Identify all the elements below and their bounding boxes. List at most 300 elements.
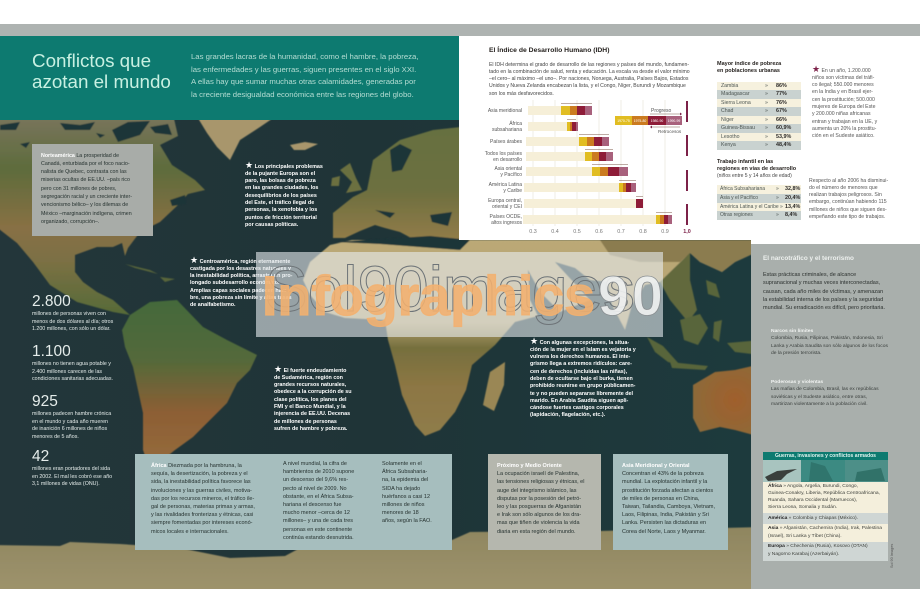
watermark orange text: Infographics90: [262, 265, 663, 327]
column 1: gal de personas, materias primas y armas,: [151, 504, 255, 510]
panel text: diaria en esta región del mundo.: [497, 529, 576, 535]
table: pobreza urbana: »: [765, 100, 768, 106]
table: pobreza urbana: Kenya: [721, 142, 736, 148]
panel text: Canadá, enturbiada por el foco nacio-: [41, 161, 130, 167]
panel text: Concentran el 43% de la pobreza: [622, 471, 704, 477]
panel text: Corea del Norte, Laos y Myanmar.: [622, 529, 706, 535]
column 2: obstante, en el África Subsa-: [283, 494, 354, 500]
row: Asia oriental y Pacifico: [526, 167, 628, 176]
column 1: micos locales e internacionales.: [151, 529, 229, 535]
column 3: [382, 461, 432, 524]
note: trabajo peligroso: realizan trabajos peligrosos. Sin: [809, 192, 882, 198]
legend: Progreso: [651, 108, 672, 114]
column 1: sida, la inestabilidad política favorece las: [151, 479, 251, 485]
note: trafico de ninos: niños son víctimas del tráfi-: [812, 75, 874, 81]
IDH paragraph: Unidos y Nueva Zelanda encabezan la lista, y el Congo, Níger, Burundi y Mozambique: [489, 83, 686, 89]
table: trabajo infantil: »: [776, 212, 779, 218]
note: mujer en el islam: cándose fuertes castigos corporales: [530, 405, 624, 411]
note: Europa: de la pujante Europa son el: [245, 171, 315, 177]
column 2: continúa estando desnutrida.: [283, 535, 354, 541]
note: Centroamerica: castigada por los desastres naturales y: [190, 266, 291, 272]
table: trabajo infantil: 20,4%: [785, 195, 800, 201]
row: Africa subsahariana: [528, 122, 578, 131]
panel text: Asia Meridional y Oriental: [622, 463, 690, 469]
column 1: sequía, la desertización, la pobreza y el: [151, 471, 248, 477]
panel: Indice de Desarrollo Humano: [459, 36, 920, 240]
intro text: Las grandes lacras de la humanidad, como el hambre, la pobreza,: [191, 52, 418, 61]
note: trabajo peligroso: do el número de menores que: [809, 185, 878, 191]
statistic: 2.800: menos de dos dólares al día; otros: [32, 319, 113, 325]
row labels: América Latina: [489, 182, 522, 188]
column 2: hambrientos de 2010 supone: [283, 469, 354, 475]
column 2: millones– y una de cada tres: [283, 518, 353, 524]
table: trabajo infantil: »: [776, 195, 779, 201]
subsection: poderosas: martirizan violentamente a la población civil.: [771, 402, 868, 407]
intro text: la creciente desigualdad económica entre las regiones del globo.: [191, 90, 414, 98]
note: trafico de ninos: en la India y en Brasil ejer-: [812, 89, 873, 95]
note: mujer en el islam: te y no pueden separarse libremente del: [530, 391, 633, 397]
statistic: 2.800: millones de personas viven con: [32, 311, 106, 317]
table: pobreza urbana: 53,9%: [776, 134, 791, 140]
south america: [122, 300, 257, 470]
subsection: poderosas: Las mafias de Colombia, Brasil, las ex repúblicas: [771, 387, 879, 392]
note: Sudamerica: obedece a la corrupción de su: [274, 389, 352, 395]
header panel: [0, 36, 459, 120]
note: Europa: ★ Los principales problemas: [245, 160, 323, 170]
table: pobreza urbana: Lesotho: [721, 134, 739, 140]
table: pobreza urbana: 48,4%: [776, 142, 791, 148]
subsection: narcos: [771, 328, 888, 356]
panel: Norteamerica: [32, 144, 153, 236]
panel text: leo y las posguerras de Afganistán: [497, 504, 581, 510]
indochina: [660, 253, 697, 322]
subsection: poderosas: [771, 380, 879, 407]
panel text: miserias ocultas de EE.UU. –país rico: [41, 177, 130, 183]
column 2: pecto al nivel de 2009. No: [283, 486, 347, 492]
row: Africa: Ruanda, Sahara Occidental (Marruecos),: [768, 498, 857, 503]
note: Europa: desequilibrios de los países: [245, 193, 317, 199]
statistic: 2.800: 2.800: [32, 293, 71, 310]
row labels: altos ingresos: [491, 220, 522, 226]
note: trafico de ninos: co ilegal; 550.000 menores: [812, 82, 874, 88]
row labels: Asia meridional: [488, 108, 522, 114]
row labels: y Caribe: [503, 188, 522, 194]
heading: pobreza urbana: en poblaciones urbanas: [717, 68, 780, 74]
intro text: las enfermedades y las guerras, siguen presentes en el siglo XXI.: [191, 64, 416, 74]
australia: [693, 364, 761, 437]
maximum value marker: [686, 101, 688, 225]
statistic: 925: [32, 393, 112, 440]
panel: Africa: [135, 454, 452, 550]
note: trafico de ninos: mujeres de Europa del Este: [812, 104, 875, 110]
panel text: Próximo y Medio Oriente: [497, 463, 562, 469]
table: pobreza urbana: 77%: [776, 91, 787, 97]
heading: trabajo infantil: (niños entre 5 y 14 años de edad): [717, 172, 792, 178]
row labels: África: [509, 120, 522, 127]
table: trabajo infantil: África Subsahariana: [720, 186, 765, 192]
note: trafico de ninos: ción en el Sudeste asiático.: [812, 133, 875, 139]
title: azotan el mundo: [32, 70, 171, 92]
note: trabajo peligroso: empeñando este tipo de trabajos.: [809, 214, 885, 220]
note: Europa: en las grandes ciudades, los: [245, 185, 318, 191]
row: Africa: [768, 482, 880, 510]
islands: [125, 264, 761, 370]
column 2: personas en este continente: [283, 527, 352, 533]
statistic: 1.100: [32, 343, 113, 382]
panel text: [497, 463, 584, 535]
note: mujer en el islam: vulnera los derechos humanos. El inte-: [530, 354, 630, 360]
x axis: 0.5: [573, 229, 581, 235]
column 2: hariana el descenso fue: [283, 502, 341, 508]
panel: Asia Meridional y Oriental: [613, 454, 728, 550]
subsection: narcos: Lanka y Arabia Saudita son sólo algunos de los focos: [771, 344, 888, 349]
table: pobreza urbana: Sierra Leona: [721, 100, 751, 106]
note: Europa: por causas políticas.: [245, 222, 298, 228]
note: mujer en el islam: ★ Con algunas excepciones, la situa-: [530, 336, 629, 346]
panel text: las tensiones religiosas y étnicas, el: [497, 479, 584, 485]
IDH paragraph: son los más desfavorecidos.: [489, 91, 554, 97]
table: trabajo infantil: Otras regiones: [720, 212, 753, 218]
x axis: [529, 229, 691, 235]
panel text: de miles de personas en China,: [622, 496, 699, 502]
row: Africa: África » Angola, Argelia, Burundi, Congo,: [768, 484, 858, 489]
note: Sudamerica: ★ El fuerte endeudamiento: [274, 364, 346, 374]
subsection: narcos: Narcos sin límites: [771, 329, 813, 334]
table: trabajo infantil: Asia y el Pacífico: [720, 195, 758, 201]
panel intro: mundial. Su erradicación es difícil, pero prioritaria.: [763, 305, 885, 311]
panel text: auge del integrismo islámico, las: [497, 488, 576, 494]
note: Sudamerica: de millones de personas: [274, 419, 337, 425]
x axis: 0.8: [639, 229, 647, 235]
table: trabajo infantil: 13,4%: [785, 204, 800, 210]
table: pobreza urbana: »: [765, 116, 768, 122]
x axis: 0.6: [595, 229, 603, 235]
table: pobreza urbana: »: [765, 125, 768, 131]
column 2: A nivel mundial, la cifra de: [283, 461, 347, 467]
africa and asia: [303, 240, 761, 436]
row labels: [485, 108, 522, 226]
note: mujer en el islam: [530, 336, 636, 418]
statistic: 42: [32, 448, 112, 487]
table: trabajo infantil: 32,8%: [785, 186, 800, 192]
x axis: 0.9: [661, 229, 669, 235]
note: mujer en el islam: cen de derechos (incluidas las niñas),: [530, 369, 627, 375]
statistic: 925: en el mundo y cada año mueren: [32, 419, 108, 425]
panel heading: El narcotráfico y el terrorismo: [763, 254, 854, 262]
panel text: vencionismo bélico– y los dilemas de: [41, 202, 128, 208]
subsection: narcos: Colombia, Rusia, Filipinas, Pakistán, Indonesia, Sri: [771, 336, 883, 341]
panel intro: la estabilidad interna de los países y la seguridad: [763, 297, 883, 303]
table: trabajo infantil: »: [780, 204, 783, 210]
table: pobreza urbana: Guinea-Bissau: [721, 125, 755, 131]
panel text: Norteamérica La prosperidad de: [41, 152, 119, 158]
panel intro: supranacional y muchas veces interconectadas,: [763, 280, 880, 286]
title: [32, 50, 171, 92]
table: guerras: [763, 452, 888, 560]
column 3: Solamente en el: [382, 461, 422, 467]
legend: 1980-90: [651, 119, 663, 123]
north america: [0, 110, 205, 315]
IDH heading: El Índice de Desarrollo Humano (IDH): [489, 47, 609, 54]
note: trabajo peligroso: Respecto al año 2006 ha disminui-: [809, 178, 888, 184]
column 3: na, la epidemia del: [382, 477, 428, 483]
row labels: oriental y CEI: [492, 204, 522, 210]
heading: trabajo infantil: [717, 158, 796, 178]
row: America Latina y Caribe: [524, 183, 636, 192]
watermark: [256, 252, 663, 337]
column 1: África Diezmada por la hambruna, la: [151, 463, 242, 469]
note: Sudamerica: de Sudamérica, región con: [274, 375, 343, 381]
legend: 1990-99: [668, 119, 680, 123]
table: pobreza urbana: 66%: [776, 116, 787, 122]
note: trafico de ninos: entran y trabajan en la UE, y: [812, 119, 877, 125]
note: Europa: puntos de fricción territorial: [245, 215, 317, 221]
table: trabajo infantil: América Latina y el Caribe: [720, 204, 779, 210]
world map: [0, 120, 751, 589]
statistic: 42: 42: [32, 448, 49, 465]
row: Asia meridional: [528, 106, 592, 115]
note: Europa: [245, 160, 323, 228]
panel text: disputas por la posesión del petró-: [497, 496, 581, 502]
statistic: 1.100: millones no tienen agua potable y: [32, 361, 111, 367]
IDH paragraph: El IDH determina el grado de desarrollo de las regiones y países del mundo, fundamen-: [489, 62, 689, 68]
statistic: 925: de inanición 6 millones de niños: [32, 426, 107, 432]
top grey band: [0, 24, 920, 36]
table header: Guerras, invasiones y conflictos armados: [775, 453, 876, 459]
panel intro: Estas prácticas criminales, de alcance: [763, 272, 856, 278]
note: trafico de ninos: ★ En un año, 1.200.000: [812, 64, 871, 74]
x axis: 1,0: [683, 229, 691, 235]
statistic: 1.100: condiciones sanitarias adecuadas.: [32, 376, 113, 382]
table: pobreza urbana: »: [765, 134, 768, 140]
panel text: mas que tiñen de violencia la vida: [497, 520, 580, 526]
column 1: involuciones y las guerras civiles, motiva-: [151, 488, 252, 494]
legend: [615, 108, 682, 134]
note: mujer en el islam: ción de la mujer en el Islam es vejatoria y: [530, 347, 636, 353]
subsection: poderosas: soviéticas y el Sudeste asiático, entre otras,: [771, 395, 867, 400]
note: Sudamerica: clase política, los planes del: [274, 397, 347, 403]
table: pobreza urbana: »: [765, 108, 768, 114]
note: trabajo peligroso: millones de niños que siguen des-: [809, 207, 887, 213]
row: America: América » Colombia y Chiapas (México).: [768, 516, 858, 521]
column 2: mucho menor –cerca de 12: [283, 510, 350, 516]
table: pobreza urbana: Madagascar: [721, 91, 750, 97]
panel: narcotrafico y terrorismo: Sol 90 Images: [890, 544, 894, 568]
subsection: poderosas: Poderosas y violentas: [771, 380, 823, 385]
table: pobreza urbana: 86%: [776, 82, 787, 88]
table header: [763, 452, 888, 460]
panel text: e Irak son sólo algunos de los dra-: [497, 512, 581, 518]
note: Centroamerica: bre, una pobreza sin límite y altas tasas: [190, 295, 292, 301]
title: Conflictos que: [32, 50, 151, 71]
row labels: Asia oriental: [494, 166, 522, 172]
progress brackets: [561, 104, 672, 212]
row: Africa: Sierra Leona, Somalia y Sudán.: [768, 505, 837, 510]
x axis: 0.3: [529, 229, 537, 235]
row: Europa central: [524, 199, 643, 208]
panel text: segregación racial y un creciente inter-: [41, 194, 132, 200]
note: trabajo peligroso: [809, 178, 888, 220]
legend: 1975-80: [634, 119, 646, 123]
IDH paragraph: –el cero– al máximo –el uno–. Por naciones, Noruega, Australia, Países Bajos, Estados: [489, 76, 688, 82]
row: Asia: (Israel), Sri Lanka y Tíbet (China).: [768, 534, 842, 538]
row: Todos los paises en desarrollo: [526, 152, 613, 161]
statistic: 42: en 2002. El mal les cobró ese año: [32, 474, 112, 480]
greenland and iceland: [193, 110, 318, 160]
panel text: Taiwan, Tailandia, Camboya, Vietnam,: [622, 504, 715, 510]
note: Centroamerica: longado subdesarrollo económico.: [190, 280, 280, 286]
row labels: Todos los países: [485, 151, 522, 157]
panel text: México –marginación indígena, crimen: [41, 211, 132, 217]
intro text: A ellas hay que sumar muchas otras calamidades, generadas por: [191, 77, 416, 86]
note: Sudamerica: injerencia de EE.UU. Decenas: [274, 411, 350, 417]
table: pobreza urbana: 76%: [776, 100, 787, 106]
note: trafico de ninos: y 200.000 niñas africanas: [812, 111, 871, 117]
lakes and inland seas: [0, 121, 470, 250]
note: Centroamerica: de analfabetismo.: [190, 302, 236, 308]
heading: pobreza urbana: Mayor índice de pobreza: [717, 60, 781, 66]
statistic: 42: millones eran portadores del sida: [32, 466, 110, 472]
table: pobreza urbana: Chad: [721, 108, 733, 114]
IDH paragraph: tado en la combinación de salud, renta y educación. La escala va desde el valor mínimo: [489, 69, 690, 75]
table: trabajo infantil: »: [776, 186, 779, 192]
table: pobreza urbana: 60,9%: [776, 125, 791, 131]
subsection: narcos: de la presión terrorista.: [771, 351, 822, 356]
row: America: [763, 513, 888, 524]
table: pobreza urbana: Zambia: [721, 82, 738, 88]
IDH paragraph: [489, 62, 690, 97]
note: Sudamerica: FMI y el Banco Mundial, y la: [274, 404, 346, 410]
legend: Retrocesos: [658, 129, 682, 134]
row labels: en desarrollo: [493, 157, 522, 163]
note: Centroamerica: Amplias capas sociales padecen ham-: [190, 288, 288, 294]
row: Asia: [768, 526, 882, 538]
note: Centroamerica: ★ Centroamérica, región eternamente: [190, 256, 290, 266]
panel text: prostitución forzada afectan a cientos: [622, 488, 713, 494]
continents: [0, 110, 761, 589]
row: Africa: Guinea-Conakry, Liberia, República Centroafricana,: [768, 491, 880, 496]
panel: narcotrafico y terrorismo: [751, 244, 920, 589]
note: mujer en el islam: marido. En Arabia Saudita siguen apli-: [530, 398, 628, 404]
table: pobreza urbana: »: [765, 82, 768, 88]
note: Europa: personas, la xenofobia y los: [245, 207, 317, 213]
column 3: millones de niños: [382, 502, 424, 508]
note: mujer en el islam: deben de ocultarse bajo el burka, tienen: [530, 376, 633, 382]
panel text: mundial. La explotación infantil y la: [622, 479, 707, 485]
panel text: pero con 31 millones de pobres,: [41, 186, 116, 192]
statistic: 925: menores de 5 años.: [32, 434, 79, 440]
column 3: menores de 18: [382, 510, 419, 516]
x axis: 0.7: [617, 229, 625, 235]
statistic: 42: 3,1 millones de vidas (ONU).: [32, 481, 100, 487]
row labels: subsahariana: [492, 127, 522, 133]
chart: IDH bars: [484, 100, 691, 235]
table: pobreza urbana: »: [765, 91, 768, 97]
row labels: y Pacífico: [500, 172, 522, 178]
row: Paises arabes: [526, 137, 609, 146]
column 2: [283, 461, 354, 541]
panel: Proximo y Medio Oriente: [488, 454, 601, 550]
panel text: Laos, Filipinas, India, Pakistán y Sri: [622, 512, 709, 518]
row labels: Países OCDE,: [489, 214, 522, 220]
antarctica: [0, 527, 761, 589]
northern asia band: [600, 240, 761, 272]
x axis: 0.4: [551, 229, 559, 235]
table: pobreza urbana: 67%: [776, 108, 787, 114]
column 2: un descenso del 9,6% res-: [283, 477, 348, 483]
note: Centroamerica: [190, 256, 292, 308]
table: pobreza urbana: Níger: [721, 116, 734, 122]
note: trafico de ninos: aumenta un 20% la prostitu-: [812, 126, 876, 132]
column 3: África Subsaharia-: [382, 469, 427, 475]
legend: 1970-75: [617, 119, 630, 123]
row: Europa: y Nagorno Karabaj (Azerbaiyán).: [768, 552, 839, 556]
panel text: organizado, corrupción–.: [41, 219, 99, 225]
note: Sudamerica: grandes recursos naturales,: [274, 382, 346, 388]
column 1: [151, 462, 255, 535]
column 1: y las rivalidades fronterizas y étnicas, casi: [151, 512, 253, 518]
note: Europa: del Este, el tráfico ilegal de: [245, 200, 314, 206]
note: mujer en el islam: (lapidación, flagelación, etc.).: [530, 412, 605, 418]
heading: trabajo infantil: regiones en vías de desarrollo: [717, 166, 796, 172]
row labels: Europa central,: [488, 198, 522, 204]
column 1: siempre fomentadas por intereses econó-: [151, 520, 252, 526]
heading: pobreza urbana: [717, 60, 782, 74]
panel text: [41, 152, 132, 225]
photo strip: [763, 460, 888, 482]
panel intro: [763, 272, 885, 311]
table: trabajo infantil: [717, 185, 801, 220]
note: Sudamerica: sufren de hambre y pobreza.: [274, 426, 347, 432]
statistic: 1.100: 2.400 millones carecen de las: [32, 369, 102, 375]
row: Europa: Europa » Chechenia (Rusia), Kosovo (OTAN): [768, 544, 868, 549]
table: pobreza urbana: »: [765, 142, 768, 148]
row: Europa: [763, 542, 888, 561]
table: pobreza urbana: [717, 82, 801, 150]
statistic: 2.800: [32, 293, 114, 332]
heading: trabajo infantil: Trabajo infantil en las: [717, 158, 773, 164]
note: trafico de ninos: [812, 64, 878, 139]
madagascar: [483, 362, 505, 411]
note: mujer en el islam: prohibido reunirse en grupo públicamen-: [530, 383, 635, 389]
panel text: Lanka. Persisten las dictaduras en: [622, 520, 706, 526]
panel text: [622, 463, 715, 535]
column 1: das por los recursos mineros, el tráfico ile-: [151, 496, 254, 502]
panel intro: causan, cada año miles de víctimas, y amenazan: [763, 289, 883, 295]
table: trabajo infantil: 8,4%: [785, 212, 797, 218]
note: trafico de ninos: cen la prostitución; 500.000: [812, 97, 875, 103]
intro text: [191, 52, 418, 98]
row labels: Países árabes: [490, 139, 522, 145]
panel text: nalista de Quebec, contrasta con las: [41, 169, 127, 175]
statistic: 1.100: 1.100: [32, 343, 71, 360]
row: Paises OCDE: [523, 215, 672, 224]
row: Asia: Asia » Afganistán, Cachemira (India), Irak, Palestina: [768, 526, 882, 531]
note: Europa: paro, las bolsas de pobreza: [245, 178, 316, 184]
statistic: 2.800: 1.200 millones, con sólo un dólar.: [32, 326, 111, 332]
column 3: SIDA ha dejado: [382, 486, 420, 492]
column 3: huérfanos a casi 12: [382, 494, 430, 500]
note: Sudamerica: [274, 364, 352, 432]
panel text: La ocupación israelí de Palestina,: [497, 471, 579, 477]
note: mujer en el islam: grismo llega a extremos ridículos: care-: [530, 361, 632, 367]
europe: [331, 126, 470, 240]
note: Centroamerica: la inestabilidad política, arrastra un pro-: [190, 273, 292, 279]
note: trabajo peligroso: embargo, continúan habiendo 115: [809, 199, 887, 205]
column 3: años, según la FAO.: [382, 518, 432, 524]
statistic: 925: millones padecen hambre crónica: [32, 411, 111, 417]
statistic: 925: 925: [32, 393, 58, 410]
